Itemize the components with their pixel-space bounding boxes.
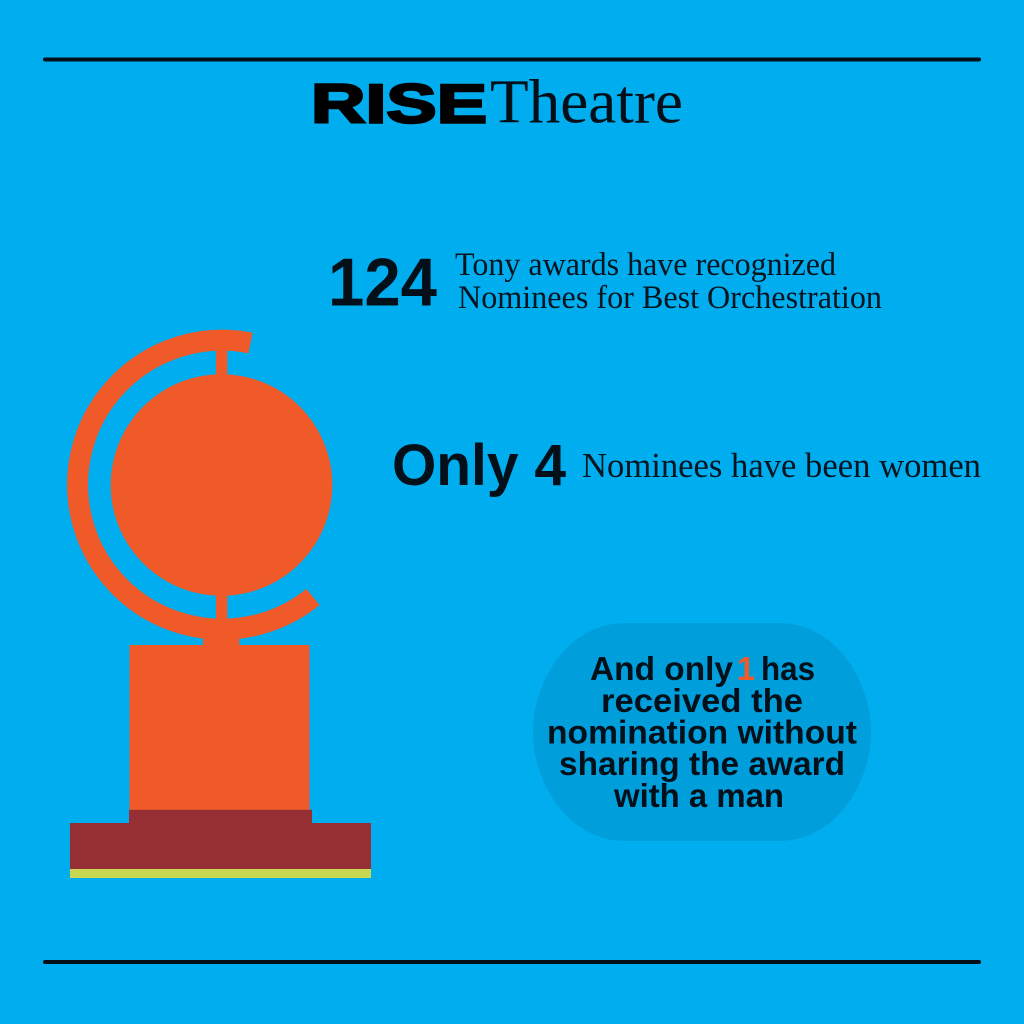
title: RISE Theatre logo <box>311 68 683 136</box>
description of 124 <box>455 247 882 316</box>
callout text: 1 <box>737 650 755 687</box>
callout: only 1 solo nominee <box>533 623 871 841</box>
number 124: 124 <box>328 244 437 320</box>
callout text <box>547 650 857 814</box>
trophy base stripe <box>70 869 371 878</box>
callout text: with a man <box>613 777 784 814</box>
trophy globe <box>111 374 332 596</box>
icon: Tony award medallion trophy <box>70 340 371 878</box>
callout text: received the <box>601 682 803 719</box>
callout text: nomination without <box>547 714 857 750</box>
description of 124: Nominees for Best Orchestration <box>458 280 882 316</box>
title: RISE Theatre logo: RISE <box>311 72 487 134</box>
stat: only 4 women <box>392 433 981 498</box>
callout background <box>533 623 871 841</box>
title: RISE Theatre logo: Theatre <box>490 68 683 136</box>
trophy base <box>70 810 371 870</box>
trophy ring arc <box>78 340 313 629</box>
trophy stems <box>203 350 239 647</box>
description of 124: Tony awards have recognized <box>455 247 836 283</box>
callout text: And only <box>590 650 734 687</box>
callout text: sharing the award <box>559 745 845 782</box>
description of only 4: Nominees have been women <box>582 446 981 485</box>
callout text: has <box>761 650 815 687</box>
stat: 124 Tony awards <box>328 244 882 320</box>
number only 4: Only 4 <box>392 433 566 498</box>
trophy column <box>130 645 310 811</box>
